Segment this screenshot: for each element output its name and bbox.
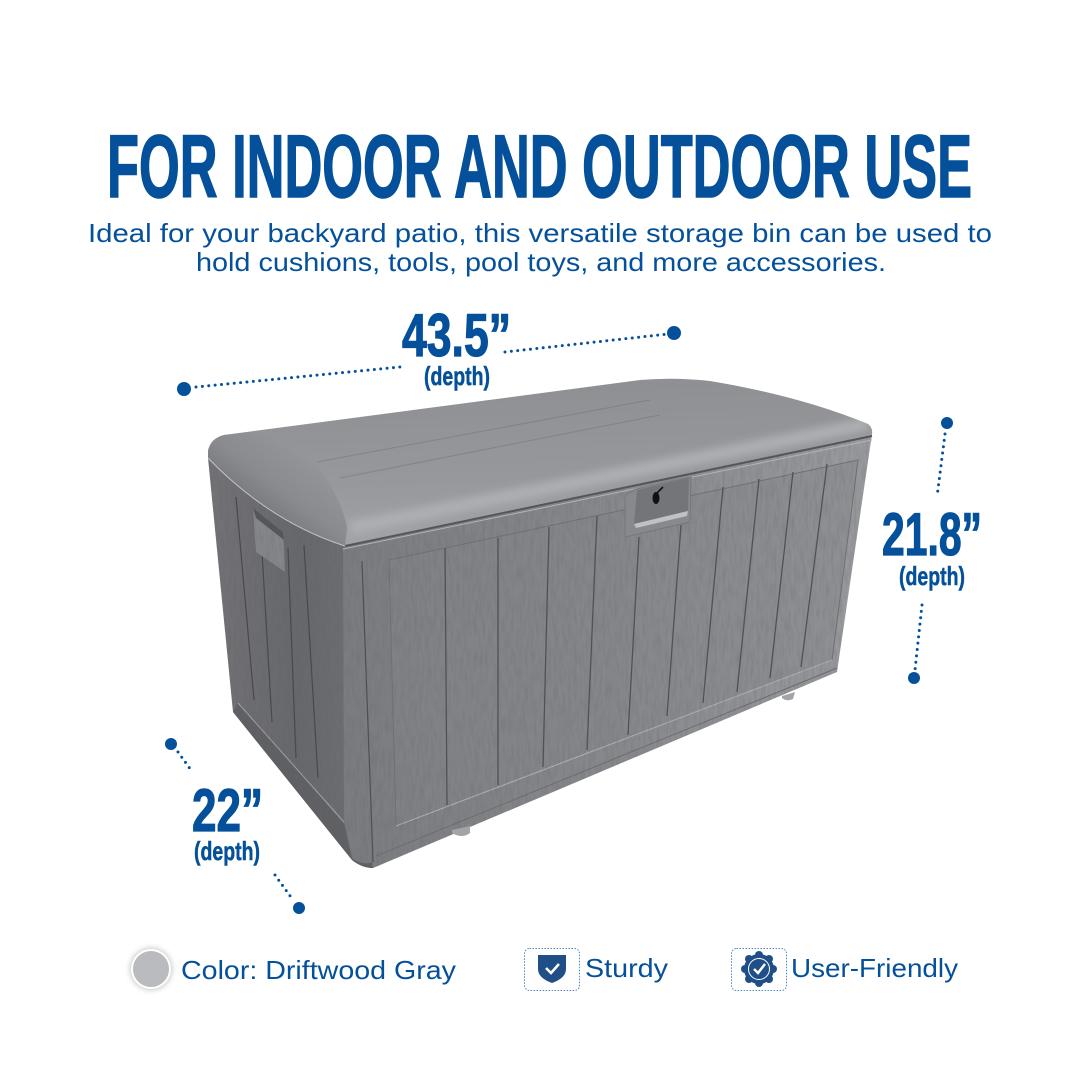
wood grain texture <box>242 434 872 844</box>
subtitle text <box>88 218 992 277</box>
box lid <box>208 379 872 549</box>
dimension: width 43.5 inches: (depth) <box>424 361 490 391</box>
box foot tabs <box>452 692 795 836</box>
dimension: width 43.5 inches: 43.5” <box>402 302 511 369</box>
dimension: width 43.5 inches <box>177 302 681 396</box>
product: storage box <box>200 379 880 875</box>
box latch <box>625 477 691 537</box>
feature: colour swatch: Color: Driftwood Gray <box>181 955 456 985</box>
box front panel <box>345 434 872 868</box>
dimension: depth 22 inches: (depth) <box>194 836 260 866</box>
subtitle text: hold cushions, tools, pool toys, and more accessories. <box>196 247 886 277</box>
subtitle text: Ideal for your backyard patio, this versatile storage bin can be used to <box>88 218 992 248</box>
dimension: depth 22 inches <box>165 738 305 914</box>
feature: user-friendly: User-Friendly <box>791 953 958 983</box>
dimension: height 21.8 inches <box>882 417 982 684</box>
dimension: height 21.8 inches: (depth) <box>899 561 965 591</box>
dimension: height 21.8 inches: 21.8” <box>882 501 982 568</box>
infographic canvas <box>90 134 991 992</box>
feature: sturdy: Sturdy <box>585 953 668 983</box>
feature: colour swatch <box>130 948 456 990</box>
dimension: depth 22 inches: 22” <box>192 777 263 844</box>
feature: sturdy <box>524 948 668 990</box>
feature: user-friendly <box>732 948 958 990</box>
box side panel <box>208 458 373 868</box>
